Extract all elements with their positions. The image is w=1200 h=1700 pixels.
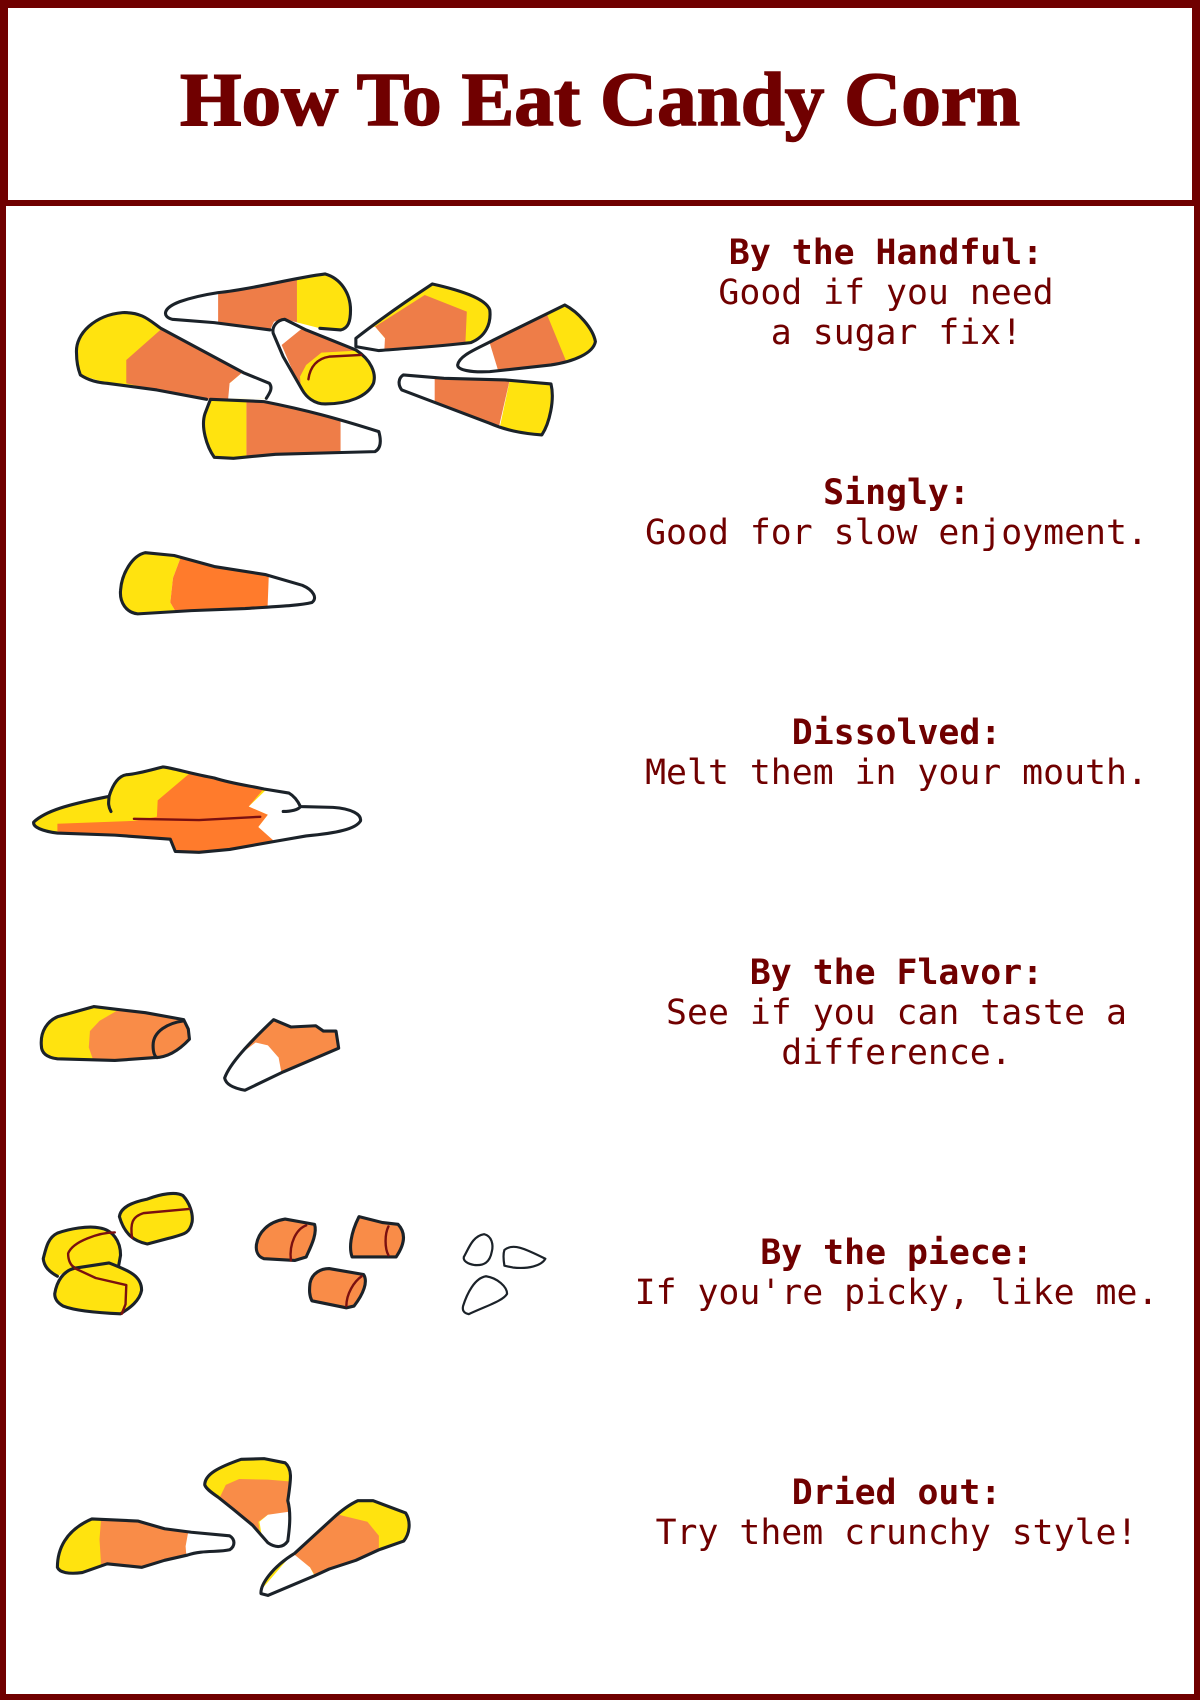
illustration: single candy corn bbox=[118, 551, 316, 616]
candy: large left bbox=[74, 311, 273, 401]
yellow pieces bbox=[43, 1193, 192, 1314]
candy: bottom bbox=[195, 397, 386, 462]
candy: upper right bbox=[348, 282, 497, 353]
illustration: eating by the flavor bbox=[38, 1005, 341, 1092]
illustration: dried out candy corn bbox=[54, 1455, 413, 1601]
text block: by the flavor: By the Flavor: See if you can taste a difference. bbox=[666, 953, 1127, 1073]
title: How To Eat Candy Corn bbox=[180, 58, 1020, 142]
candy: dried right bbox=[256, 1497, 413, 1601]
text block: by the piece: By the piece: If you're picky, like me. bbox=[635, 1233, 1158, 1313]
text block: dissolved: Dissolved: Melt them in your mouth. bbox=[645, 713, 1148, 793]
candy: center bbox=[271, 318, 376, 406]
candy: lower right bbox=[398, 373, 554, 436]
orange pieces bbox=[256, 1217, 404, 1308]
white pieces bbox=[463, 1234, 545, 1314]
text block: singly: Singly: Good for slow enjoyment. bbox=[645, 473, 1148, 553]
candy: far right bbox=[456, 303, 597, 374]
text block: dried out: Dried out: Try them crunchy style! bbox=[656, 1473, 1137, 1553]
text block: by the handful: By the Handful: Good if you need a sugar fix! bbox=[718, 233, 1075, 353]
illustration: separated pieces bbox=[43, 1193, 545, 1314]
candy: bitten tip bbox=[222, 1017, 341, 1092]
candy: dried top bbox=[201, 1455, 295, 1550]
candy: top bbox=[164, 272, 352, 332]
candy: bitten base bbox=[38, 1005, 191, 1064]
illustration: dissolved candy corn bbox=[31, 764, 364, 856]
illustration: handful of candy corn bbox=[69, 267, 605, 462]
candy: dried left bbox=[56, 1517, 236, 1575]
